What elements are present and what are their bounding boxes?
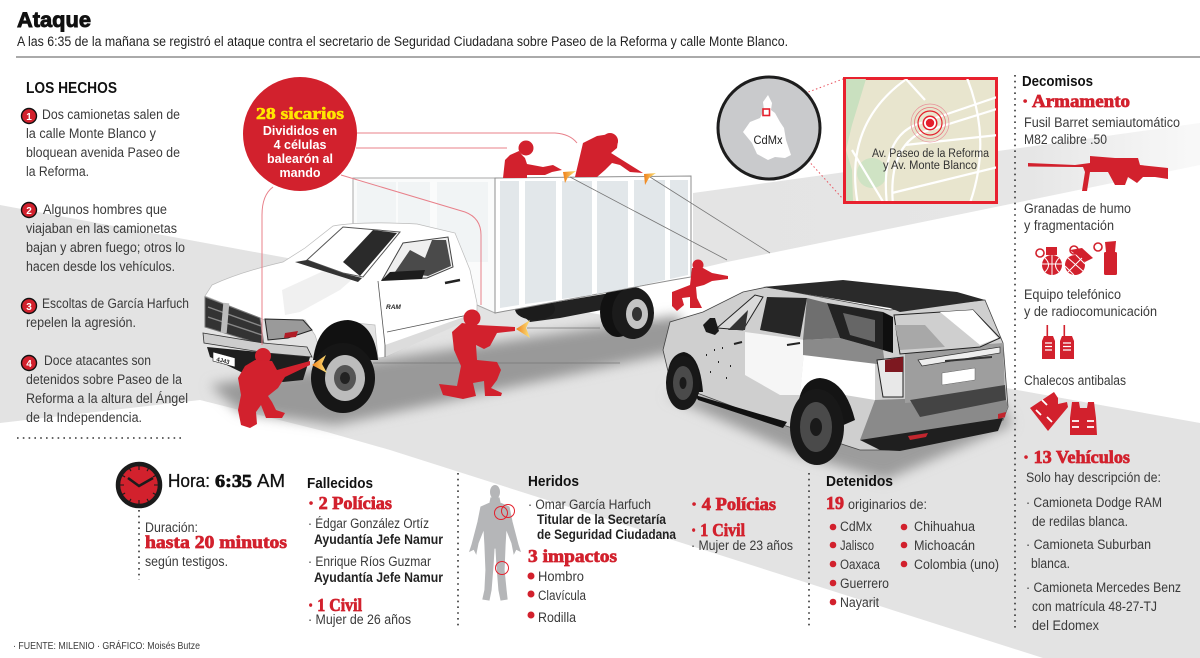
text: granadas xyxy=(1024,201,1131,233)
text: equipo xyxy=(1024,287,1157,319)
step 2 xyxy=(22,202,185,274)
callout connector lines xyxy=(262,133,577,345)
text: duracion: Duración: xyxy=(145,520,198,535)
subtitle: A las 6:35 de la mañana se registró el ataque contra el secretario de Seguridad Ciudadana sobre Paseo de la Reforma y calle Monte Blanco. xyxy=(17,34,788,49)
text: vehicle descriptions: con matrícula 48-27-TJ xyxy=(1032,599,1157,614)
text: 2 policias: Ayudantía Jefe Namur xyxy=(314,532,444,547)
list: origin states: Chihuahua xyxy=(914,519,975,534)
step 4: detenidos sobre Paseo de la xyxy=(26,372,182,387)
text: vehicle descriptions: · Camioneta Suburban xyxy=(1026,537,1151,552)
text: 2 policias: · Édgar González Ortíz xyxy=(308,516,429,531)
gunfire trajectories xyxy=(373,177,770,363)
text: chalecos: Chalecos antibalas xyxy=(1024,373,1126,388)
text: 2 policias: · 2 Polícias xyxy=(308,493,392,513)
shooter: on cargo box left xyxy=(503,140,576,183)
text: 1 civil: · Mujer de 26 años xyxy=(308,612,411,627)
step 3: repelen la agresión. xyxy=(26,315,136,330)
step 3: Escoltas de García Harfuch xyxy=(42,296,189,311)
step 1: 1 xyxy=(26,112,32,123)
shooter: on cargo box right xyxy=(575,133,656,185)
text: vehicle descriptions: · Camioneta Mercedes Benz xyxy=(1026,580,1181,595)
text: 1 civil: · 1 Civil xyxy=(308,595,362,615)
locator: CdMx circle: CdMx xyxy=(754,135,783,147)
icon: human body with wounds xyxy=(470,485,520,600)
header rule xyxy=(16,56,1200,58)
text: vehicle descriptions: del Edomex xyxy=(1032,618,1099,633)
callout: 28 sicarios: 4 células xyxy=(274,138,326,152)
list: origin states: Colombia (uno) xyxy=(914,557,999,572)
footer source: · FUENTE: MILENIO · GRÁFICO: Moisés Butze xyxy=(13,639,200,652)
shooter: front kneeling xyxy=(238,348,327,428)
callout: 28 sicarios: Divididos en xyxy=(263,124,337,138)
step 2: hacen desde los vehículos. xyxy=(26,259,175,274)
step 4: Doce atacantes son xyxy=(44,353,151,368)
locator dotted lines xyxy=(768,79,843,199)
text: 1 civil xyxy=(308,595,411,627)
step 1: Dos camionetas salen de xyxy=(42,107,180,122)
panel: fallecidos xyxy=(307,476,444,627)
icon: grenades xyxy=(1036,241,1117,275)
text: hora xyxy=(168,471,285,491)
text: 19 originarios: 19 xyxy=(826,493,844,513)
text: granadas: Granadas de humo xyxy=(1024,201,1131,216)
text: vehicle descriptions xyxy=(1026,470,1181,633)
text: duracion: según testigos. xyxy=(145,554,228,569)
list: origin states: Guerrero xyxy=(840,576,889,591)
text: vehicle descriptions: de redilas blanca. xyxy=(1032,514,1128,529)
step 4: de la Independencia. xyxy=(26,410,142,425)
text: hora: Hora: xyxy=(168,471,210,491)
text: hora: 6:35 xyxy=(215,471,252,491)
list: impacts: Clavícula xyxy=(538,588,586,603)
step 4: 4 xyxy=(26,359,32,370)
text: 4 policias y civil xyxy=(691,494,793,553)
text: duracion: hasta 20 minutos xyxy=(145,532,287,552)
heading: 13 vehiculos: · 13 Vehículos xyxy=(1023,447,1130,467)
illustration: white pickup truck with cargo box: 4J43 xyxy=(216,357,231,366)
heading: detenidos: Detenidos xyxy=(826,474,893,490)
callout: 28 sicarios: mando xyxy=(280,166,321,180)
illustration: white pickup truck with cargo box: RAM xyxy=(386,304,401,311)
panel: detenidos xyxy=(826,474,999,610)
icon: radios xyxy=(1042,325,1074,359)
heading: decomisos: Decomisos xyxy=(1022,74,1093,90)
illustration: white pickup truck with cargo box xyxy=(203,176,691,425)
panel: hora y duracion xyxy=(118,464,287,569)
text: vehicle descriptions: Solo hay descripción de: xyxy=(1026,470,1161,485)
heading: los hechos: LOS HECHOS xyxy=(26,80,117,97)
list: origin states: CdMx xyxy=(840,519,872,534)
text: duracion xyxy=(145,520,287,569)
locator: map inset xyxy=(844,78,1000,205)
locator: CdMx circle xyxy=(718,77,820,179)
text: 4 policias y civil: · 4 Polícias xyxy=(691,494,776,514)
step 1: la Reforma. xyxy=(26,164,89,179)
callout: 28 sicarios: 28 sicarios xyxy=(256,104,344,123)
icon: vests xyxy=(1030,392,1097,435)
illustration: gray SUV xyxy=(663,280,1012,480)
list: origin states: Jalisco xyxy=(840,538,874,553)
heading: heridos: Heridos xyxy=(528,474,579,490)
step 4: Reforma a la altura del Ángel xyxy=(26,391,188,406)
text: 19 originarios xyxy=(826,493,927,513)
text: omar garcia harfuch: Titular de la Secretaría xyxy=(537,512,666,527)
text: 2 policias: · Enrique Ríos Guzmar xyxy=(308,554,431,569)
shooter: middle kneeling xyxy=(439,310,530,399)
icon: rifle xyxy=(1028,156,1168,191)
panel: los hechos xyxy=(22,80,189,425)
step 2: viajaban en las camionetas xyxy=(26,221,177,236)
step 3 xyxy=(22,296,189,330)
step 4 xyxy=(22,353,188,425)
text: fusil: Fusil Barret semiautomático xyxy=(1024,115,1180,130)
text: 4 policias y civil: · 1 Civil xyxy=(691,520,745,540)
text: vehicle descriptions: · Camioneta Dodge RAM xyxy=(1026,495,1162,510)
callout: 28 sicarios xyxy=(243,77,357,191)
step 1 xyxy=(22,107,180,179)
heading: fallecidos: Fallecidos xyxy=(307,476,373,492)
step 3: 3 xyxy=(26,302,32,313)
text: equipo: y de radiocomunicación xyxy=(1024,304,1157,319)
step 2: Algunos hombres que xyxy=(43,202,167,217)
step 1: la calle Monte Blanco y xyxy=(26,126,156,141)
panel: decomisos xyxy=(1022,74,1181,633)
shooter: crouching behind SUV xyxy=(672,260,728,311)
text: omar garcia harfuch: · Omar García Harfuch xyxy=(528,497,651,512)
text: 2 policias: Ayudantía Jefe Namur xyxy=(314,570,444,585)
text: 3 impactos: 3 impactos xyxy=(528,546,617,566)
step 2: bajan y abren fuego; otros lo xyxy=(26,240,185,255)
locator: map inset: y Av. Monte Blanco xyxy=(883,160,977,172)
panel: heridos xyxy=(470,474,793,625)
heading: armamento: · Armamento xyxy=(1022,91,1130,111)
list: impacts: Rodilla xyxy=(538,610,576,625)
list: impacts: Hombro xyxy=(538,569,584,584)
icon: clock xyxy=(118,464,160,506)
text: 4 policias y civil: · Mujer de 23 años xyxy=(691,538,793,553)
text: fusil xyxy=(1024,115,1180,147)
text: omar garcia harfuch: de Seguridad Ciudadana xyxy=(537,527,676,542)
text: vehicle descriptions: blanca. xyxy=(1031,556,1070,571)
locator: map inset: Av. Paseo de la Reforma xyxy=(872,148,990,160)
title: Ataque xyxy=(17,8,91,32)
text: fusil: M82 calibre .50 xyxy=(1024,132,1107,147)
list: origin states xyxy=(830,519,999,610)
list: origin states: Michoacán xyxy=(914,538,975,553)
text: 2 policias xyxy=(308,493,444,585)
text: omar garcia harfuch xyxy=(528,497,676,542)
text: 19 originarios: originarios de: xyxy=(848,497,927,512)
callout: 28 sicarios: balearón al xyxy=(267,152,333,166)
text: hora: AM xyxy=(257,471,285,491)
text: equipo: Equipo telefónico xyxy=(1024,287,1121,302)
list: impacts xyxy=(528,569,586,625)
list: origin states: Oaxaca xyxy=(840,557,880,572)
step 2: 2 xyxy=(26,206,32,217)
step 1: bloquean avenida Paseo de xyxy=(26,145,180,160)
text: granadas: y fragmentación xyxy=(1024,218,1114,233)
list: origin states: Nayarit xyxy=(840,595,879,610)
